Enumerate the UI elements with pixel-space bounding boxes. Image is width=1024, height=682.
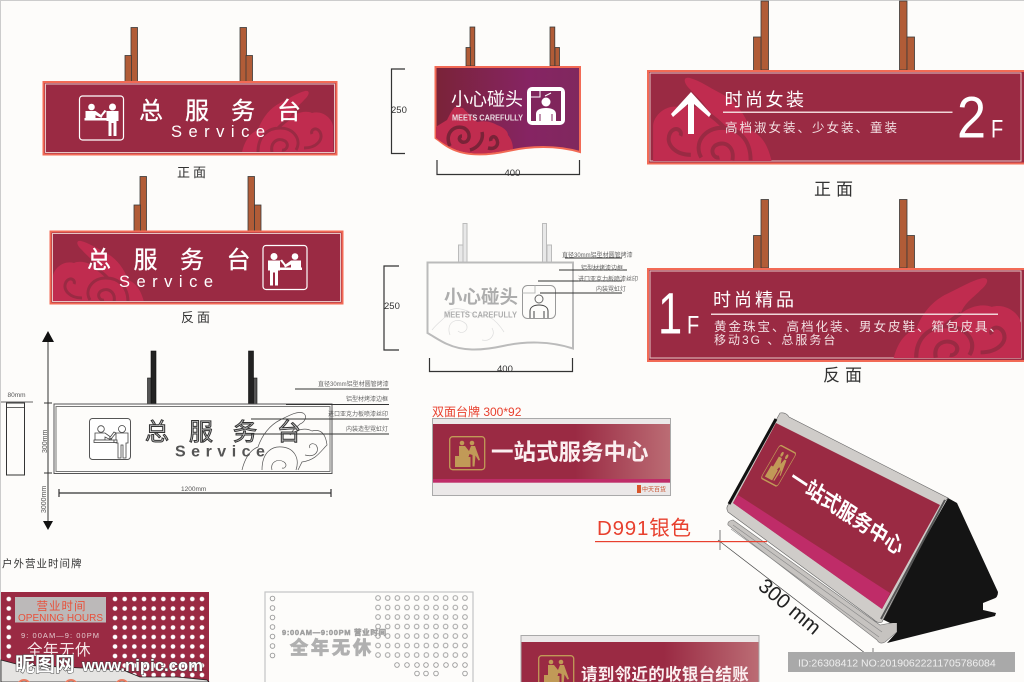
label english: OPENING HOURS <box>18 613 103 624</box>
sign title: 小心碰头 <box>451 90 523 110</box>
outline board <box>54 404 332 474</box>
watermark: image id: ID:26308412 NO:20190622211705786084 <box>798 658 996 670</box>
black left edge <box>729 419 776 504</box>
cloud pattern <box>53 240 144 301</box>
label: front: 正面 <box>814 180 858 199</box>
height dimension: 250 <box>384 301 400 312</box>
leader lines and callouts: 进口亚克力板喷漆丝印 <box>578 275 638 283</box>
caption: outdoor opening hours sign: 户外营业时间牌 <box>2 557 82 570</box>
size caption: 双面台牌 300*92 <box>432 404 522 419</box>
floor letter: F <box>991 115 1003 143</box>
height dimension: 250 <box>391 105 407 116</box>
orange circles <box>18 680 128 682</box>
panel: service desk sign front <box>44 28 336 160</box>
pink stripe <box>733 495 890 609</box>
ring grid <box>373 593 470 660</box>
height dimension <box>391 69 407 154</box>
sign subtitle: MEETS CAREFULLY <box>452 114 524 122</box>
torn grey bottom <box>1 660 209 682</box>
brand logo: 中天百货 <box>642 486 666 494</box>
height labels: 3000mm <box>41 486 48 513</box>
label chinese: 营业时间 <box>36 599 86 613</box>
leader lines and callouts: 直径30mm铝型材圆管烤漆 <box>318 380 389 388</box>
leader lines and callouts: 进口亚克力板喷漆丝印 <box>328 410 388 418</box>
floor number: 1 <box>658 281 682 346</box>
cloud pattern <box>653 78 772 161</box>
icon: gold desk <box>761 445 796 487</box>
icon: service desk <box>263 246 307 290</box>
grey posts <box>458 224 552 262</box>
black end cap <box>880 498 998 643</box>
cloud pattern <box>436 107 513 154</box>
leader lines and callouts <box>538 251 638 293</box>
outline cloud <box>432 309 504 340</box>
panel: floor sign 1F <box>648 200 1024 368</box>
panel: checkout sign <box>521 636 759 682</box>
watermark: nipic: www.nipic.com <box>81 656 203 675</box>
wavy sign board <box>436 67 580 154</box>
description: 黄金珠宝、高档化装、男女皮鞋、箱包皮具、 <box>714 319 1004 334</box>
frame <box>432 418 670 496</box>
cloud pattern <box>894 278 1021 358</box>
outline cloud <box>242 412 327 470</box>
red band <box>433 424 670 479</box>
sign title: 总服务台 <box>139 98 323 125</box>
width dimension: 1200mm <box>181 486 206 493</box>
dot grid <box>110 594 207 682</box>
height labels <box>41 429 49 513</box>
left rings and lower rings <box>270 596 467 676</box>
floor number: 2 <box>957 85 986 150</box>
leader lines and callouts: 铝型材烤漆边框 <box>346 395 388 403</box>
board <box>1 592 209 682</box>
outline subtitle: Service <box>175 444 270 460</box>
icon: service desk <box>80 96 124 140</box>
sign title: 一站式服务中心 <box>491 440 649 465</box>
outline title: 总服务台 <box>145 419 321 446</box>
leader lines and callouts: 内装霓虹灯 <box>596 285 626 293</box>
technical drawing: service desk sign <box>1 331 389 530</box>
sign board <box>50 232 342 304</box>
hanging posts <box>754 1 914 70</box>
board outline <box>265 592 473 682</box>
red band <box>522 642 758 682</box>
outline icon <box>90 418 130 460</box>
silver frame <box>727 413 948 623</box>
panel: floor sign 1F: 移动3G 、总服务台 <box>714 332 837 347</box>
panel: opening hours board <box>1 592 209 682</box>
panel: table sign 3D <box>718 413 998 668</box>
sign board <box>44 82 336 154</box>
description: 高档淑女装、少女装、童装 <box>725 120 899 135</box>
silver base <box>728 520 897 643</box>
panel: floor sign 2F <box>648 1 1024 171</box>
outline subtitle: MEETS CAREFULLY <box>444 310 518 320</box>
side view <box>1 392 33 475</box>
width dimension <box>437 160 580 179</box>
hanging posts <box>125 28 252 82</box>
leader lines and callouts: 内装造型霓虹灯 <box>346 425 388 433</box>
grey label box <box>15 597 106 622</box>
side view: 80mm <box>8 392 26 399</box>
outline board <box>428 262 573 350</box>
heading: 时尚精品 <box>713 290 797 310</box>
heading: 时尚女装 <box>724 90 806 110</box>
sign board <box>648 269 1024 361</box>
brand logo <box>637 485 666 494</box>
width dimension: 400 <box>497 364 513 375</box>
icon: gold desk <box>450 437 485 470</box>
watermark: nipic: 昵图网 <box>15 654 75 676</box>
watermark: image id <box>788 652 1015 672</box>
sign subtitle: Service <box>119 273 220 291</box>
width dimension: 400 <box>504 168 520 179</box>
outline icon <box>522 286 556 318</box>
overlapped hours text: 9:00AM—9:00PM 营业时间 <box>282 627 386 637</box>
height dimension <box>384 266 400 350</box>
outline title: 小心碰头 <box>444 286 518 308</box>
sign title: 总服务台 <box>87 247 273 274</box>
sign title: 一站式服务中心 <box>786 465 907 560</box>
icon: bump head <box>527 87 565 125</box>
width dimension <box>59 486 331 497</box>
hours: 9: 00AM—9: 00PM <box>21 631 99 640</box>
sign board <box>648 71 1024 164</box>
material callout: D991银色 <box>597 517 692 540</box>
label: front: 正面 <box>177 165 209 180</box>
leader lines and callouts: 直径30mm铝型材圆管烤漆 <box>562 251 633 259</box>
panel: service desk sign back <box>50 176 342 310</box>
red face <box>733 423 940 609</box>
height arrow <box>42 331 54 530</box>
length label: 300 mm <box>754 574 825 639</box>
sign subtitle: Service <box>171 123 272 141</box>
frame <box>521 636 759 682</box>
height labels: 300mm <box>42 429 49 453</box>
divider <box>723 112 952 113</box>
panel: table sign flat <box>432 404 670 496</box>
watermark: nipic <box>15 654 203 676</box>
panel: outline opening hours board <box>265 592 473 682</box>
closed days note: 全年无休 <box>27 641 91 659</box>
label: back: 反面 <box>823 366 867 385</box>
leader lines and callouts: 铝型材烤漆边框 <box>581 264 623 272</box>
leader lines and callouts <box>251 380 389 434</box>
overlapped closed days text: 全年无休 <box>290 637 374 658</box>
dark end edge <box>881 500 945 619</box>
hanging posts <box>466 27 560 66</box>
divider <box>711 314 998 315</box>
pink stripe <box>433 479 670 483</box>
floor letter: F <box>687 311 699 339</box>
label: back: 反面 <box>181 310 213 325</box>
hanging posts <box>134 176 261 231</box>
dimension line <box>718 530 874 668</box>
width dimension <box>430 358 572 375</box>
black posts <box>148 351 257 404</box>
cloud pattern <box>242 90 333 152</box>
panel: watch your head sign <box>391 27 580 179</box>
technical drawing: watch your head sign <box>384 224 638 375</box>
icon: gold desk <box>539 656 574 682</box>
hanging posts <box>754 200 914 268</box>
icon: up arrow <box>671 92 711 134</box>
